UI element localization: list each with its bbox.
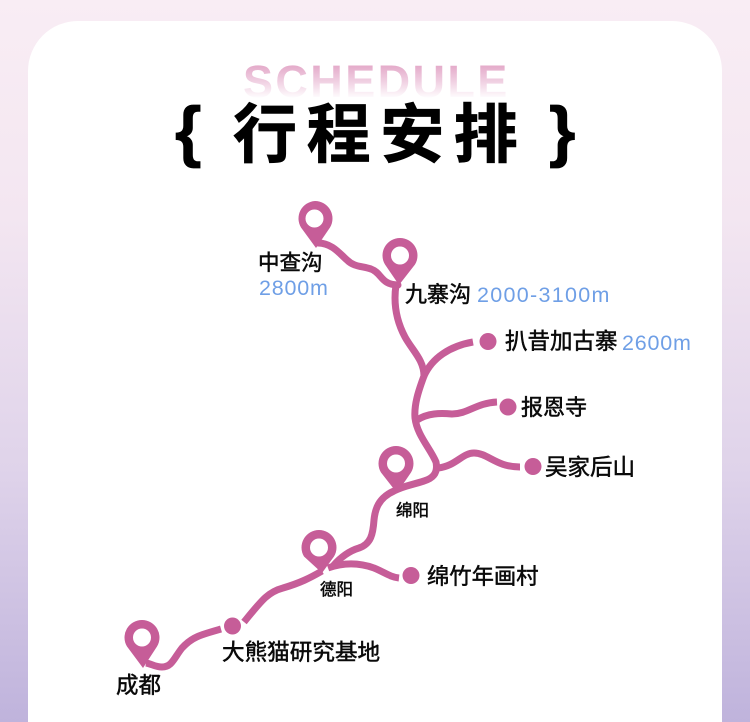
- route: 大熊猫研究基地 to 成都: [146, 629, 221, 667]
- route: branch to 绵竹年画村: [328, 564, 399, 578]
- label: 报恩寺: 报恩寺: [521, 395, 587, 420]
- pin: 德阳: [302, 530, 336, 573]
- route: branch to 扒昔加古寨: [424, 342, 473, 376]
- label: 2600m: 2600m: [622, 331, 692, 355]
- title: {: [175, 93, 201, 169]
- label: 吴家后山: 吴家后山: [545, 455, 635, 480]
- title: }: [549, 93, 575, 169]
- label: 2800m: 2800m: [259, 276, 329, 300]
- label: 绵阳: 绵阳: [396, 502, 429, 520]
- label: 2000-3100m: 2000-3100m: [477, 283, 611, 307]
- pin: 九寨沟: [383, 238, 417, 285]
- label: 九寨沟: 九寨沟: [405, 282, 471, 307]
- heading: SCHEDULE: SCHEDULE: [243, 56, 510, 107]
- route: branch to 吴家后山: [438, 453, 520, 468]
- dot: 绵竹年画村: [402, 567, 420, 584]
- pin: 中查沟: [298, 201, 332, 248]
- route: 德阳 to 大熊猫研究基地: [244, 571, 322, 622]
- title: 行程安排: [233, 84, 527, 176]
- dot: 吴家后山: [524, 458, 542, 475]
- route: branch to 报恩寺: [417, 402, 497, 420]
- label: 成都: 成都: [116, 673, 161, 698]
- pin: 绵阳: [379, 446, 413, 493]
- label: 德阳: 德阳: [320, 581, 353, 599]
- dot: 扒昔加古寨: [480, 333, 496, 350]
- dot: 大熊猫研究基地: [224, 618, 241, 634]
- label: 大熊猫研究基地: 大熊猫研究基地: [222, 640, 380, 665]
- route: main line: [333, 285, 436, 566]
- dot: 报恩寺: [500, 398, 516, 416]
- label: 扒昔加古寨: 扒昔加古寨: [505, 329, 618, 354]
- label: 绵竹年画村: 绵竹年画村: [427, 564, 538, 589]
- label: 中查沟: 中查沟: [258, 251, 323, 275]
- pin: 成都: [125, 620, 159, 668]
- route: 中查沟 to 九寨沟: [318, 243, 398, 285]
